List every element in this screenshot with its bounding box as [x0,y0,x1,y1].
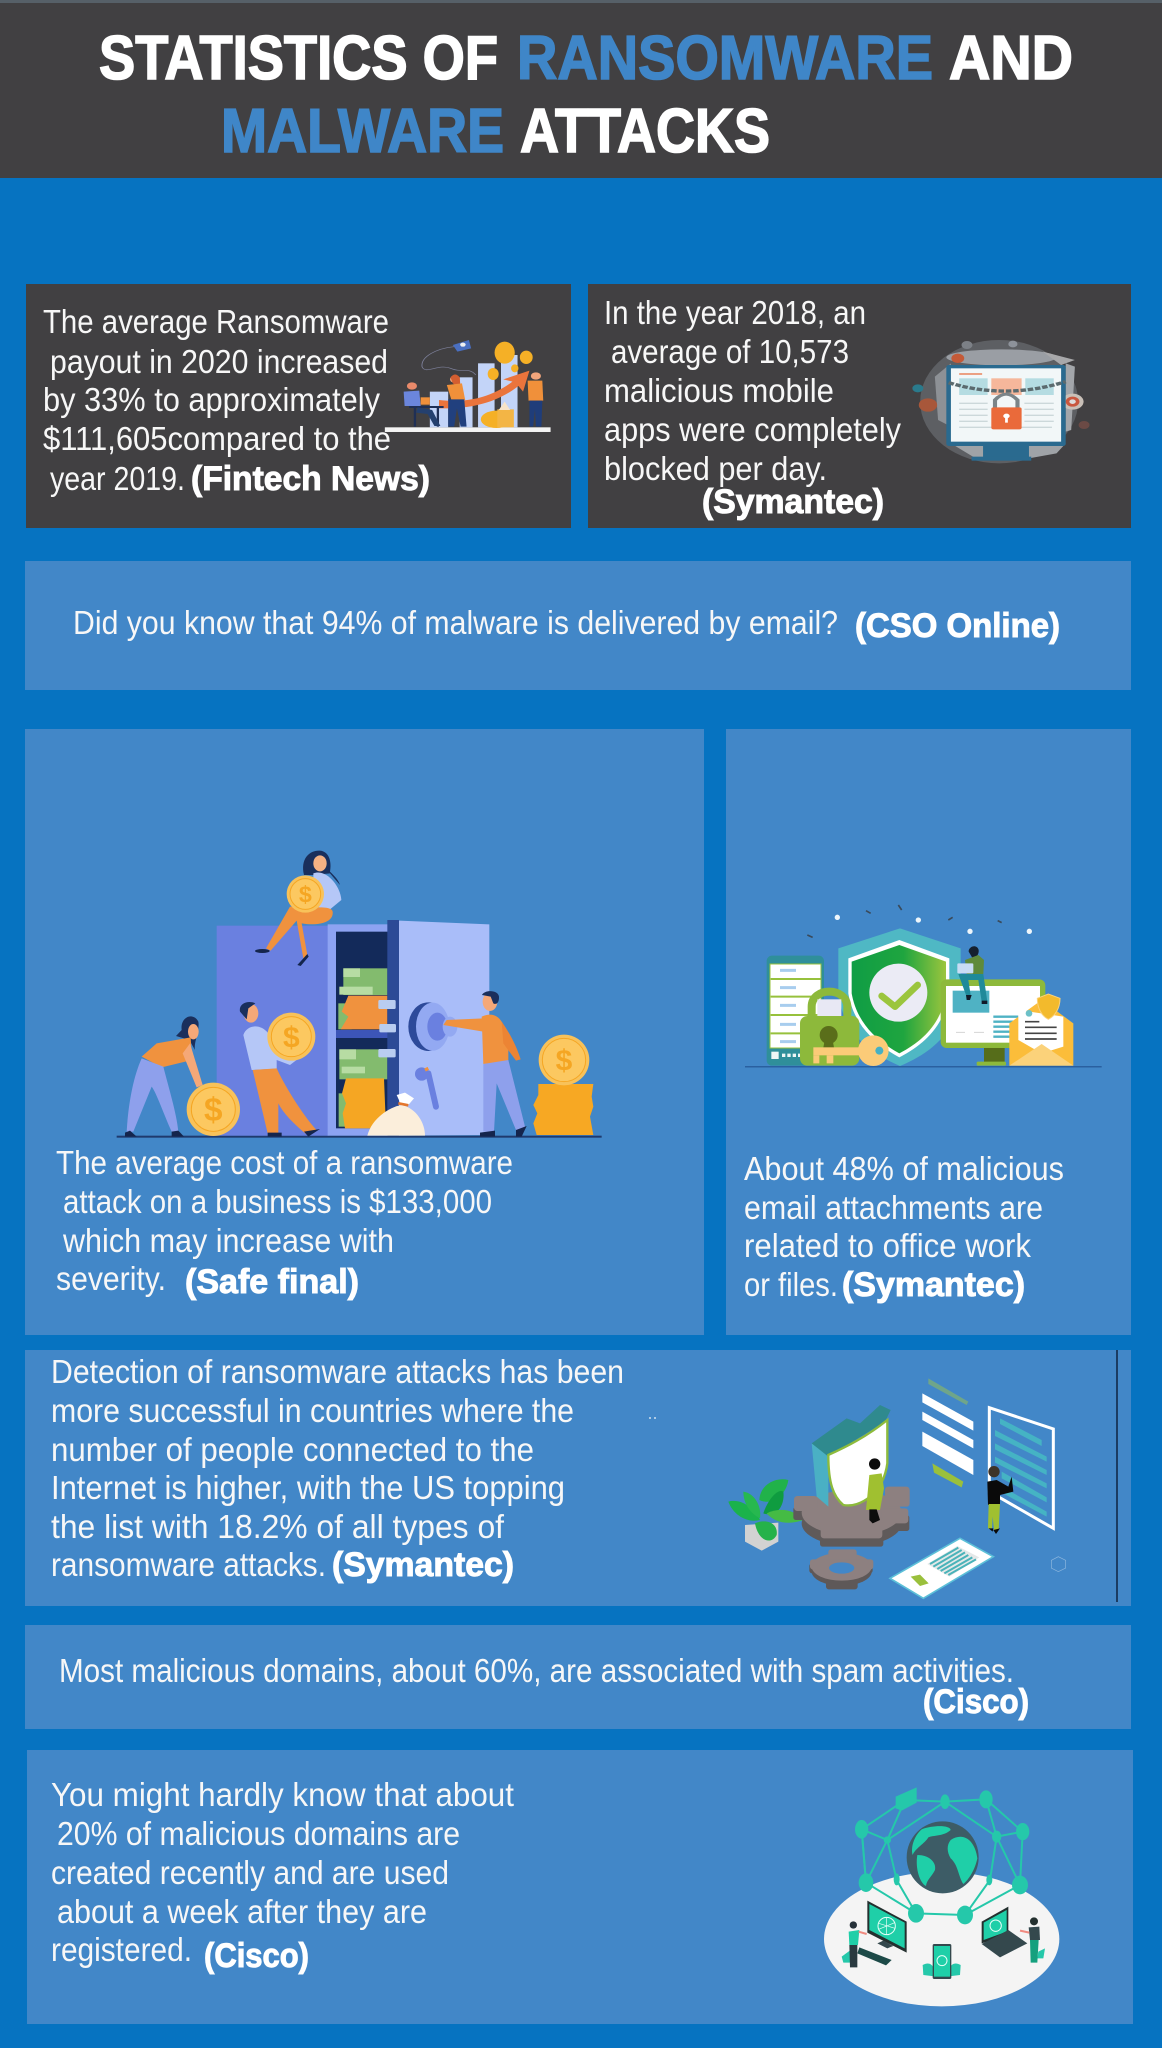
detection text: (Symantec) [332,1546,514,1584]
woman sitting on safe [255,851,341,966]
payout text [43,303,430,498]
payout text: The average Ransomware [43,303,389,340]
mobile apps text: (Symantec) [702,483,884,521]
mobile apps text [604,294,901,521]
padlock and key [800,992,889,1066]
attachments text: email attachments are [744,1189,1043,1226]
globe [907,1821,979,1893]
panel: malicious domains and spam [25,1625,1131,1729]
title: ATTACKS [520,97,770,166]
title: STATISTICS OF [99,24,498,93]
man turning dial [443,991,527,1137]
panel: detection of ransomware attacks [25,1350,1131,1606]
detection text: Internet is higher, with the US topping [51,1469,565,1506]
attachments text: (Symantec) [842,1266,1025,1304]
cost text: which may increase with [62,1222,394,1259]
man carrying coin: $ [283,1021,300,1054]
safe [217,920,489,1136]
cost text: severity. [56,1260,166,1297]
mobile apps text: In the year 2018, an [604,294,866,331]
title: AND [949,24,1073,93]
panel: average ransomware payout [26,284,571,528]
detection text: number of people connected to the [51,1431,534,1468]
woman pushing coin [125,1016,240,1137]
illustration: security shield [745,905,1102,1067]
man carrying coin [240,1002,320,1137]
mobile apps text: blocked per day. [604,450,827,487]
title: RANSOMWARE [517,24,933,93]
payout text: $111,605compared to the [43,420,391,457]
email stat text: (CSO Online) [855,607,1060,645]
spam text [59,1652,1029,1721]
domains text: (Cisco) [204,1937,309,1975]
payout text: year 2019. [50,460,185,497]
domains text: You might hardly know that about [51,1776,514,1813]
laptop and man [982,1907,1045,1963]
server [767,956,824,1066]
attachments text [744,1150,1064,1304]
detection text: Detection of ransomware attacks has been [51,1353,624,1390]
attachments text: About 48% of malicious [744,1150,1064,1187]
icon: growth chart team [385,340,551,432]
woman sitting on safe: $ [299,881,312,907]
domains text: created recently and are used [51,1854,449,1891]
spam text: (Cisco) [923,1683,1029,1721]
network nodes [855,1787,1029,1924]
detection text: the list with 18.2% of all types of [51,1508,505,1545]
network links [862,1799,1023,1915]
panel: recently created malicious domains [27,1750,1133,2024]
mobile apps text: apps were completely [604,411,901,448]
panel: malware delivered by email [25,561,1131,690]
cost text: (Safe final) [185,1263,359,1301]
spam text: Most malicious domains, about 60%, are associated with spam activities. [59,1652,1014,1689]
document and man [987,1408,1053,1534]
person with laptop [957,946,987,1004]
attachments text: or files. [744,1266,838,1303]
woman pushing coin: $ [204,1092,223,1129]
payout text: by 33% to approximately [43,381,380,418]
detection text [51,1353,624,1584]
monitor [941,979,1045,1066]
payout text: (Fintech News) [191,460,430,498]
shield [838,928,961,1066]
tablet [890,1538,993,1598]
panel: malicious mobile apps [588,284,1131,528]
domains text: registered. [51,1931,192,1968]
mobile apps text: malicious mobile [604,372,834,409]
title [99,24,1073,166]
cost text [56,1144,513,1301]
detection text: more successful in countries where the [51,1392,574,1429]
phone [923,1944,961,1979]
mobile apps text: average of 10,573 [611,333,849,370]
form bars [922,1378,973,1487]
shield [812,1405,891,1523]
envelope [1009,994,1073,1066]
icon: locked screen [912,340,1090,463]
domains text: 20% of malicious domains are [57,1815,460,1852]
title banner [0,0,1162,178]
coin stack: $ [556,1045,573,1078]
gears [793,1487,910,1589]
money bag [367,1093,425,1136]
domains text: about a week after they are [57,1893,427,1930]
domains text [51,1776,514,1975]
email stat text: Did you know that 94% of malware is delivered by email? [73,604,838,641]
cost text: attack on a business is $133,000 [63,1183,492,1220]
cost text: The average cost of a ransomware [56,1144,513,1181]
panel: average cost of a ransomware attack [25,729,704,1335]
title: MALWARE [221,97,504,166]
monitor and woman [842,1901,907,1967]
payout text: payout in 2020 increased [50,343,388,380]
plant [728,1479,803,1551]
illustration: connected globe [824,1787,1059,2006]
coin stack [533,1035,593,1135]
detection text: ransomware attacks. [51,1546,326,1583]
illustration: isometric shield and gears [728,1378,1066,1598]
attachments text: related to office work [744,1227,1031,1264]
illustration: people and bank safe [117,851,602,1138]
panel: malicious email attachments [726,729,1131,1335]
